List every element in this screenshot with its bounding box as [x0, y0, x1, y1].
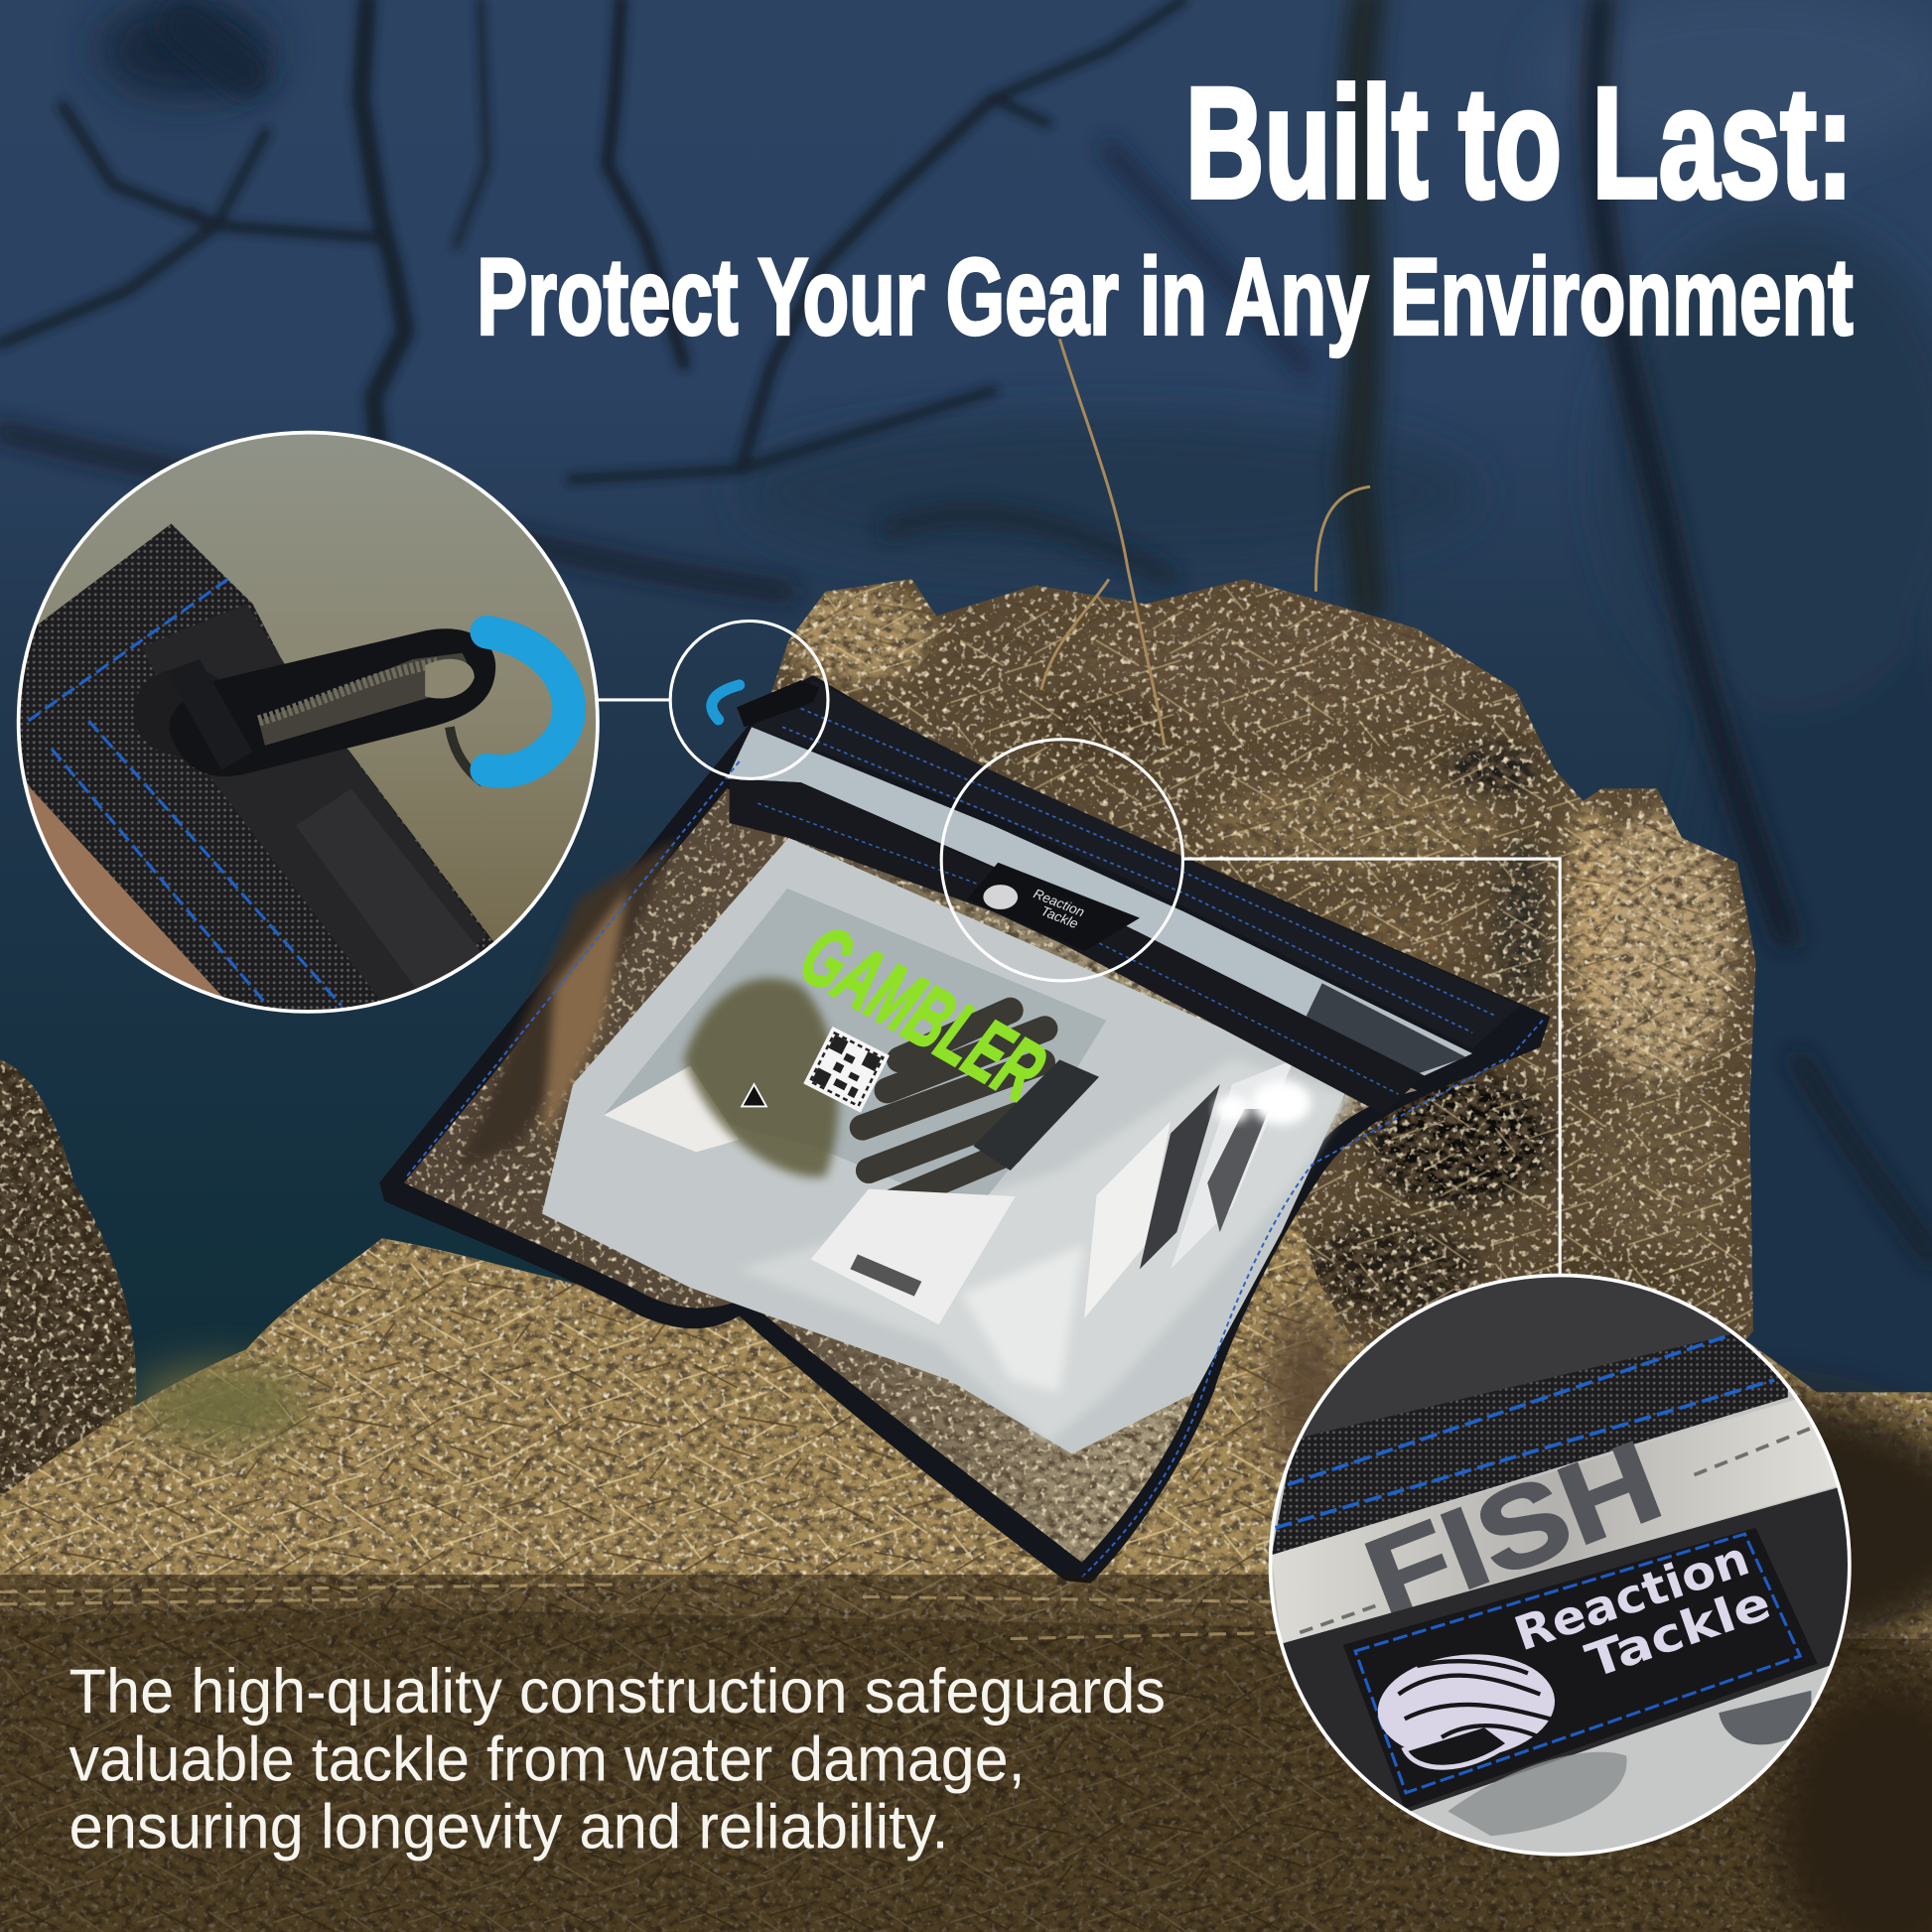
- blue stitching: [29, 579, 342, 1006]
- lower webbing strap: [1282, 1484, 1855, 1811]
- hook base: [133, 669, 218, 757]
- webbing corner: [0, 523, 495, 1023]
- lower clear area with print: [1411, 1663, 1849, 1861]
- connector line to clip close-up: [598, 699, 671, 701]
- pouch: clear waterproof bag: [379, 675, 1550, 1584]
- dark reflection strip: [1307, 983, 1466, 1075]
- FISH print: FISH: [1350, 1418, 1677, 1643]
- clear strip with printed word: [1272, 1399, 1842, 1644]
- Gambler logo text: GAMBLER: [785, 906, 1059, 1121]
- dark card: [973, 1059, 1099, 1171]
- dark flap: [1303, 1277, 1731, 1438]
- upper webbing strap: [1272, 1320, 1788, 1555]
- clip body: [169, 628, 495, 776]
- clear strip above strap: [727, 727, 1472, 1075]
- photo shadow band at bottom: [0, 1575, 1932, 1932]
- Reaction Tackle mini label: [967, 863, 1140, 951]
- hook strap: [730, 778, 1425, 1114]
- body copy: ensuring longevity and reliability.: [69, 1793, 949, 1863]
- Reaction Tackle woven text: Tackle: [1580, 1576, 1777, 1690]
- white packet panel: [604, 1066, 740, 1152]
- woven label: [1343, 1528, 1818, 1809]
- dry grass mound: [0, 1207, 1932, 1932]
- bass head logo: [1373, 1647, 1559, 1767]
- packets stack: [542, 838, 1349, 1453]
- body copy: [69, 1657, 1166, 1863]
- pouch clear window: [404, 788, 1417, 1563]
- blue edge stitching: [407, 761, 1543, 1176]
- callout: label close-up circle: [1269, 1276, 1855, 1861]
- warning triangle: [742, 1084, 766, 1106]
- callout: label ring on pouch: [941, 740, 1182, 981]
- connector line to label close-up: [1182, 859, 1560, 1278]
- left bank brush: [0, 1059, 136, 1528]
- stump with moss and weathered wood: [727, 339, 1774, 1380]
- mini clip icon: [712, 680, 819, 727]
- barcode label: [811, 1189, 1016, 1324]
- callout: clip close-up circle: [0, 433, 598, 1023]
- pouch binding outline: [379, 675, 1550, 1584]
- bait algae and worms: [684, 978, 1044, 1201]
- callout: small clip ring on pouch: [670, 621, 828, 778]
- blue carabiner handle: [486, 632, 569, 771]
- Gambler packet: [604, 889, 1106, 1213]
- QR code: [803, 1027, 890, 1113]
- reflective wrappers: [961, 1059, 1311, 1392]
- hand skin: [28, 788, 222, 997]
- Reaction Tackle mini label: Tackle: [1038, 903, 1080, 931]
- Reaction Tackle woven text: Reaction: [1508, 1531, 1756, 1662]
- top webbing band: [752, 680, 1520, 1048]
- Reaction Tackle mini label: Reaction: [1032, 886, 1086, 919]
- body copy: valuable tackle from water damage,: [69, 1725, 1026, 1794]
- body copy: The high-quality construction safeguards: [69, 1657, 1166, 1726]
